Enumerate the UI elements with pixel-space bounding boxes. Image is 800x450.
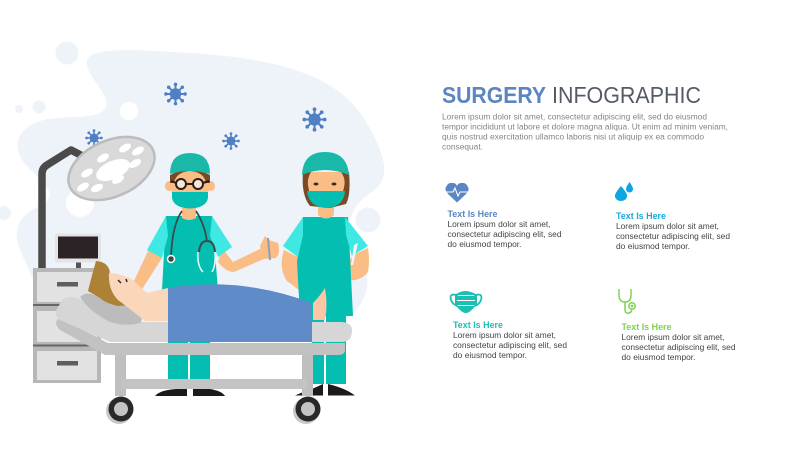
icon: water drops <box>615 182 633 201</box>
doctor with glasses <box>133 153 279 396</box>
text block: drops: Lorem ipsum dolor sit amet, <box>616 221 719 231</box>
blanket <box>168 284 312 342</box>
virus icons <box>85 83 327 150</box>
background blob <box>0 42 388 340</box>
text block: heart: do eiusmod tempor. <box>448 239 522 249</box>
intro text: tempor incididunt ut labore et dolore magna aliqua. Ut enim ad minim veniam, <box>442 122 728 132</box>
text block: heart <box>448 209 562 249</box>
text block: stethoscope <box>622 322 736 362</box>
text block: stethoscope: Text Is Here <box>622 322 672 332</box>
text block: mask: Text Is Here <box>453 320 503 330</box>
patient <box>80 261 326 325</box>
title <box>442 82 701 108</box>
text block: stethoscope: Lorem ipsum dolor sit amet, <box>622 332 724 342</box>
doctor with hair <box>282 152 369 396</box>
text block: drops: Text Is Here <box>616 211 666 221</box>
title: SURGERY <box>442 82 546 108</box>
text block: stethoscope: do eiusmod tempor. <box>622 352 696 362</box>
text block: mask <box>453 320 567 360</box>
icon: heart <box>445 183 469 202</box>
wheels <box>106 396 320 424</box>
text block: heart: Text Is Here <box>448 209 498 219</box>
cabinet <box>33 268 101 383</box>
intro text: consequat. <box>442 142 483 152</box>
text block: stethoscope: consectetur adipiscing elit, sed <box>622 342 736 352</box>
text block: heart: Lorem ipsum dolor sit amet, <box>448 219 550 229</box>
icon: face mask <box>451 291 481 313</box>
text block: heart: consectetur adipiscing elit, sed <box>448 229 562 239</box>
text block: drops: consectetur adipiscing elit, sed <box>616 231 730 241</box>
intro text <box>442 112 728 152</box>
intro text: quis nostrud exercitation ullamco laboris nisi ut aliquip ex ea commodo <box>442 132 704 142</box>
text block: drops <box>616 211 730 251</box>
intro text: Lorem ipsum dolor sit amet, consectetur adipiscing elit, sed do eiusmod <box>442 112 707 122</box>
text block: mask: Lorem ipsum dolor sit amet, <box>453 330 556 340</box>
text block: mask: do eiusmod tempor. <box>453 350 527 360</box>
hospital bed <box>56 297 352 424</box>
title: INFOGRAPHIC <box>552 82 701 108</box>
monitor <box>55 234 101 269</box>
text block: drops: do eiusmod tempor. <box>616 241 690 251</box>
icon: stethoscope <box>619 289 635 313</box>
surgical lamp <box>42 124 164 270</box>
text block: mask: consectetur adipiscing elit, sed <box>453 340 567 350</box>
